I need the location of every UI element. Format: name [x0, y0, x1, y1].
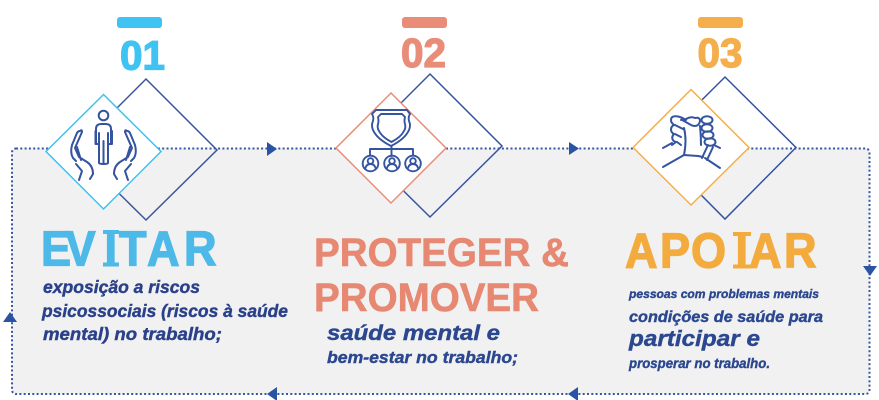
accent bar 03: [698, 17, 743, 28]
panel: step 02: [314, 17, 569, 367]
panel: step 01: [41, 17, 288, 344]
title PROTEGER & PROMOVER: [314, 231, 569, 320]
panel: step 03: [625, 17, 823, 371]
accent bar 02: [402, 17, 447, 28]
front diamond 03: [633, 90, 749, 205]
description 03: condições de saúde para: [629, 309, 823, 326]
title EVITAR: EVITAR: [41, 221, 217, 276]
accent bar 01: [117, 17, 162, 28]
description 03: pessoas com problemas mentais: [628, 287, 819, 301]
outline diamond 02: [358, 74, 502, 217]
title PROTEGER & PROMOVER: PROTEGER &: [314, 231, 569, 275]
arrow: left side: [3, 312, 17, 322]
arrow: bottom right: [568, 387, 578, 400]
description 02: [327, 322, 518, 367]
arrow: right side: [863, 266, 877, 276]
icon: person protected by hands: [71, 111, 136, 180]
number 03: 03: [698, 30, 742, 76]
arrow: bottom left: [267, 387, 277, 400]
front diamond 02: [336, 93, 446, 203]
icon: clasped hands: [663, 116, 720, 168]
outline diamond 03: [654, 77, 796, 219]
number 02: 02: [401, 30, 446, 76]
front diamond 01: [46, 94, 161, 209]
title APOIAR: APOIAR: [625, 223, 817, 278]
number 01: 01: [120, 32, 165, 78]
description 03: prosperar no trabalho.: [628, 356, 770, 371]
arrow: top left: [267, 142, 277, 156]
description 03: [628, 287, 823, 371]
description 03: participar e: [628, 326, 760, 351]
panel: grey background with dotted border: [12, 148, 870, 394]
outline diamond 01: [75, 79, 217, 220]
description 01: exposição a riscos: [43, 277, 200, 297]
description 01: [41, 277, 288, 344]
arrow: top right: [569, 142, 579, 155]
icon: shield over three people: [363, 110, 421, 171]
description 02: bem-estar no trabalho;: [327, 349, 518, 367]
description 01: mental) no trabalho;: [43, 324, 222, 344]
title PROTEGER & PROMOVER: PROMOVER: [314, 276, 539, 320]
description 02: saúde mental e: [327, 322, 500, 345]
description 01: psicossociais (riscos à saúde: [41, 301, 288, 321]
